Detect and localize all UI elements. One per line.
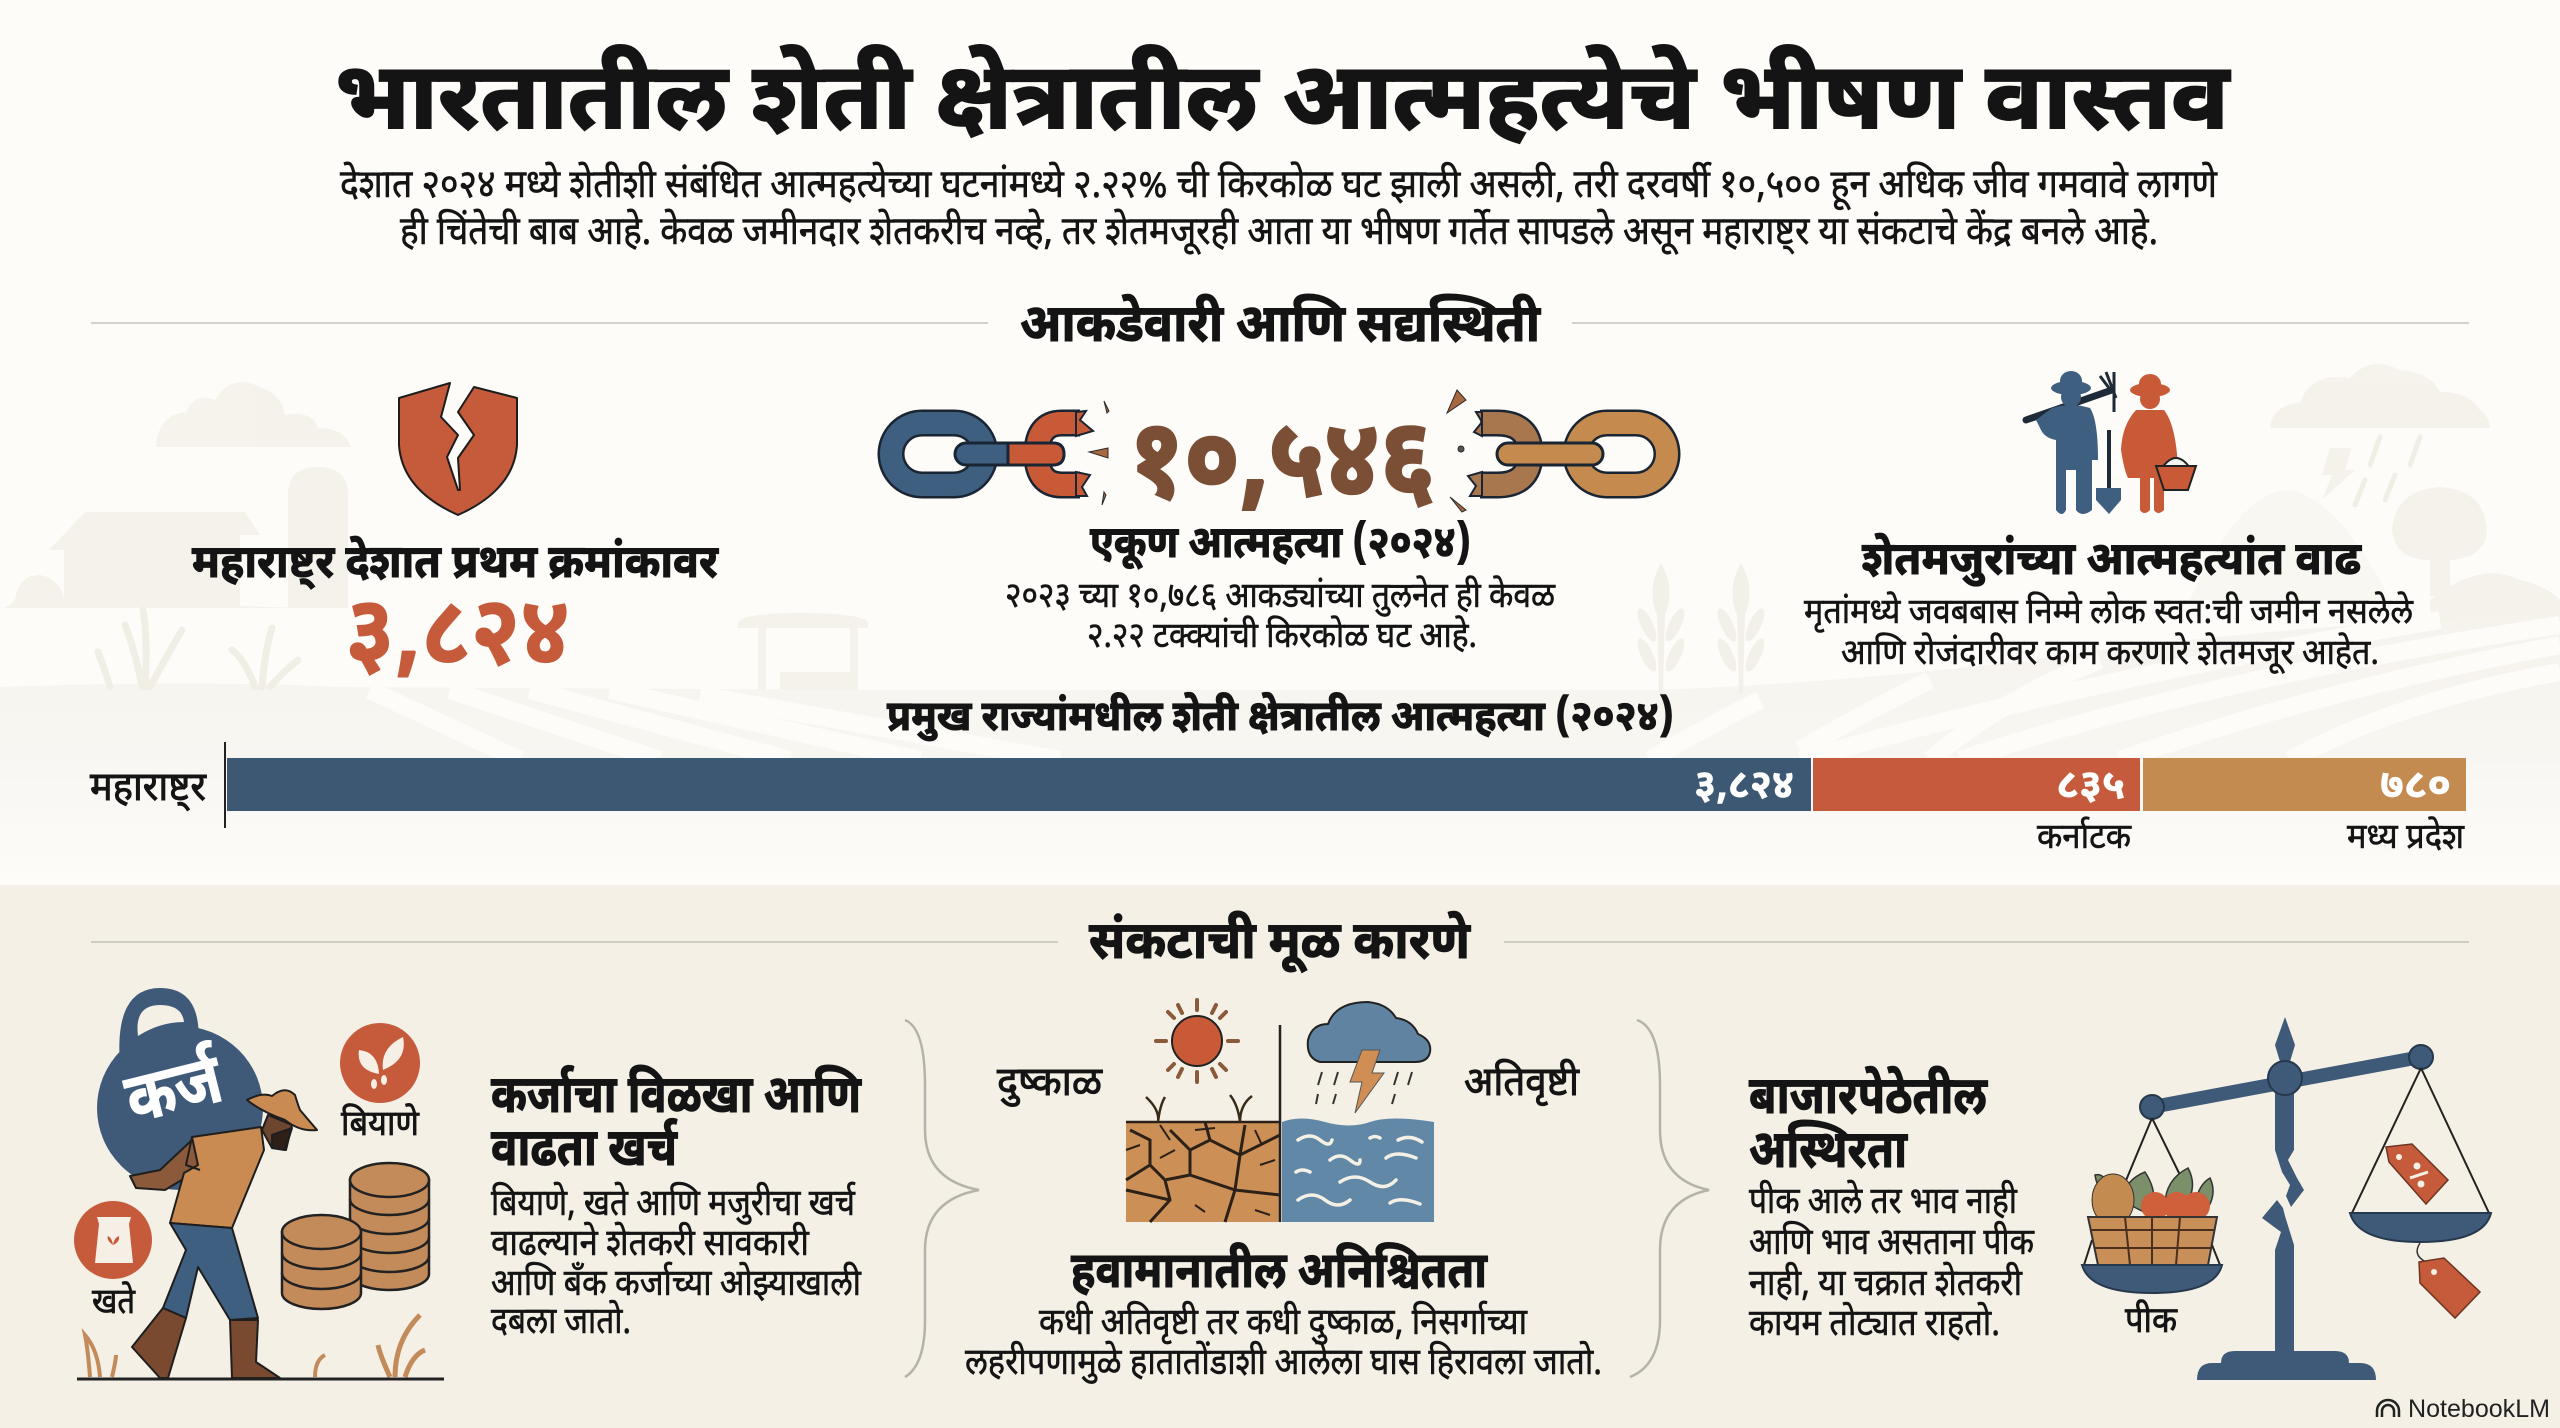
icon: crop basket [2088,1168,2217,1265]
cause text: debt: बियाणे, खते आणि मजुरीचा खर्च [491,1181,856,1231]
bar: Madhya Pradesh [2143,758,2466,863]
illustration: cracked earth [1126,1095,1280,1222]
bar: Karnataka [1813,758,2140,863]
background: faded farm landscape [0,364,2560,885]
cause text: market: कायम तोट्यात राहतो. [1749,1302,2000,1351]
watermark: NotebookLM: NotebookLM [2408,1395,2550,1423]
arrow: right brace [1630,1020,1709,1377]
cause text: debt: कर्जाचा विळखा आणि [491,1065,862,1134]
arrow: left brace [905,1020,979,1377]
title: भारतातील शेती क्षेत्रातील आत्महत्येचे भीषण वास्तव [335,46,2230,166]
bar: Madhya Pradesh: ७८० [2380,763,2451,815]
illustration: flood water [1282,1118,1434,1222]
panel: Maharashtra first [192,383,719,704]
cause text: debt: वाढता खर्च [491,1118,678,1187]
bar: Maharashtra: ३,८२४ [1694,763,1794,815]
cause text: weather: हवामानातील अनिश्चितता [1071,1242,1488,1308]
cause text: debt: वाढल्याने शेतकरी सावकारी [491,1222,810,1271]
panel: farm labourers [1804,371,2413,679]
cause text: market: पीक आले तर भाव नाही [1749,1180,2018,1229]
cause text: weather: कधी अतिवृष्टी तर कधी दुष्काळ, निसर्गाच्या [1039,1300,1528,1350]
icon: fertiliser [74,1201,152,1328]
cause text: market [1749,1066,2034,1351]
text: labourers description [1804,591,2413,679]
text: labourers description: आणि रोजंदारीवर काम करणारे शेतमजूर आहेत. [1841,632,2379,679]
subtitle paragraph [340,162,2218,260]
ground and grass [77,1315,444,1379]
label: crop: पीक [2125,1299,2178,1347]
figure: farmer [130,1090,317,1378]
icon: seeds [340,1023,420,1150]
chart heading: प्रमुख राज्यांमधील शेती क्षेत्रातील आत्महत्या (२०२४) [887,692,1674,748]
heading: total: एकूण आत्महत्या (२०२४) [1090,518,1471,575]
subtitle paragraph: देशात २०२४ मध्ये शेतीशी संबंधित आत्महत्येच्या घटनांमध्ये २.२२% ची किरकोळ घट झाली असली, तरी दरवर्षी १०,५०० हून अधिक जीव गमवावे लागणे [340,162,2218,213]
icon: debt weight: कर्ज [118,1038,235,1151]
illustration: farmer carrying debt [74,988,444,1379]
icon: farm workers [2026,371,2196,514]
text: labourers description: मृतांमध्ये जवबबास निम्मे लोक स्वत:ची जमीन नसलेले [1804,591,2413,638]
panel: root causes [0,885,2560,1428]
illustration: broken balance scale [2082,1017,2491,1380]
cause text: debt: आणि बँक कर्जाच्या ओझ्याखाली [491,1261,862,1311]
heading: Maharashtra rank: महाराष्ट्र देशात प्रथम क्रमांकावर [192,534,719,596]
stacked bar chart [90,742,2466,863]
bar: Maharashtra [227,758,1811,815]
cause text: market: नाही, या चक्रात शेतकरी [1749,1262,2023,1311]
cause text: debt: दबला जातो. [491,1300,631,1349]
cause text: market: अस्थिरता [1749,1121,1908,1189]
label: drought: दुष्काळ [997,1060,1103,1112]
section heading: statistics: आकडेवारी आणि सद्यस्थिती [1020,294,1542,363]
icon: broken chain [891,411,1667,496]
text: total description: २०२३ च्या १०,७८६ आकड्यांच्या तुलनेत ही केवळ [1005,575,1556,622]
axis label: महाराष्ट्र [90,765,207,817]
label: fertiliser: खते [92,1281,136,1328]
cause text: debt [491,1065,862,1349]
icon: sun [1156,1000,1238,1082]
text: total description [1005,575,1556,662]
icon: coin stacks [282,1163,429,1309]
number: total suicides: १०,५४६ [1129,399,1435,540]
icon: price tags [2386,1144,2480,1318]
bar: Karnataka: कर्नाटक [2037,816,2132,863]
icon: chain sparks [1089,390,1466,512]
icon: debt weight [97,988,263,1190]
section heading: root causes: संकटाची मूळ कारणे [1089,911,1471,980]
bar: Madhya Pradesh: मध्य प्रदेश [2347,816,2465,863]
cause text: market: बाजारपेठेतील [1749,1066,1988,1135]
icon: broken shield [399,383,517,515]
panel: total suicides [891,390,1667,662]
illustration: drought and flood [997,1000,1580,1222]
cause text: weather [965,1242,1602,1390]
heading: labourers: शेतमजुरांच्या आत्महत्यांत वाढ [1862,531,2362,593]
icon: storm cloud [1308,1002,1430,1113]
subtitle paragraph: ही चिंतेची बाब आहे. केवळ जमीनदार शेतकरीच नव्हे, तर शेतमजूरही आता या भीषण गर्तेत सापडले असून महाराष्ट्र या संकटाचे केंद्र बनले आहे. [400,209,2158,260]
cause text: weather: लहरीपणामुळे हातातोंडाशी आलेला घास हिरावला जातो. [965,1340,1602,1390]
number: Maharashtra count: ३,८२४ [345,579,570,704]
bar: Karnataka: ८३५ [2056,763,2125,815]
text: total description: २.२२ टक्क्यांची किरकोळ घट आहे. [1087,615,1477,662]
label: excess rain: अतिवृष्टी [1464,1059,1580,1112]
label: seeds: बियाणे [341,1103,420,1150]
cause text: market: आणि भाव असताना पीक [1749,1221,2034,1270]
